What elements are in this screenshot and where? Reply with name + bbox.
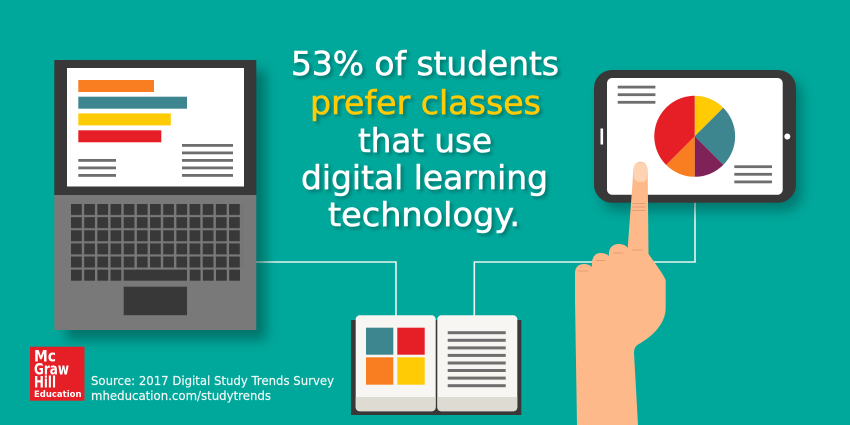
- McGraw Hill Education logo: Graw: [34, 360, 69, 378]
- headline: prefer classes: [310, 84, 541, 122]
- laptop screen: [67, 68, 244, 186]
- source text: [91, 374, 334, 403]
- keyboard: [71, 204, 242, 281]
- McGraw Hill Education logo: Mc: [34, 347, 56, 366]
- headline: that use: [360, 124, 494, 162]
- headline: [291, 45, 562, 236]
- left page: [356, 315, 436, 411]
- McGraw Hill Education logo: Hill: [34, 372, 56, 391]
- source text: Source: 2017 Digital Study Trends Survey: [91, 374, 334, 388]
- headline: that use: [358, 122, 492, 160]
- headline: 53% of students: [291, 45, 559, 83]
- bar chart: [78, 80, 187, 142]
- headline: technology.: [328, 196, 520, 234]
- right page: [437, 315, 517, 411]
- headline: technology.: [330, 198, 522, 236]
- tablet: [594, 70, 802, 211]
- fingernail: [634, 162, 647, 182]
- laptop: [54, 60, 266, 340]
- knuckle creases: [578, 204, 646, 271]
- pie chart: [654, 96, 735, 177]
- headline: prefer classes: [312, 86, 544, 124]
- tablet text lines: [618, 86, 772, 183]
- open book: [351, 315, 521, 415]
- headline: digital learning: [304, 162, 550, 200]
- McGraw Hill Education logo: [30, 347, 84, 401]
- headline: digital learning: [301, 159, 548, 197]
- trackpad: [124, 287, 187, 315]
- tablet buttons: [600, 128, 790, 144]
- connector lines: [256, 202, 695, 316]
- screen text lines: [78, 144, 233, 177]
- source text: mheducation.com/studytrends: [91, 389, 271, 403]
- headline: 53% of students: [294, 48, 562, 86]
- McGraw Hill Education logo: Education: [34, 390, 82, 400]
- pointing hand: [575, 162, 666, 425]
